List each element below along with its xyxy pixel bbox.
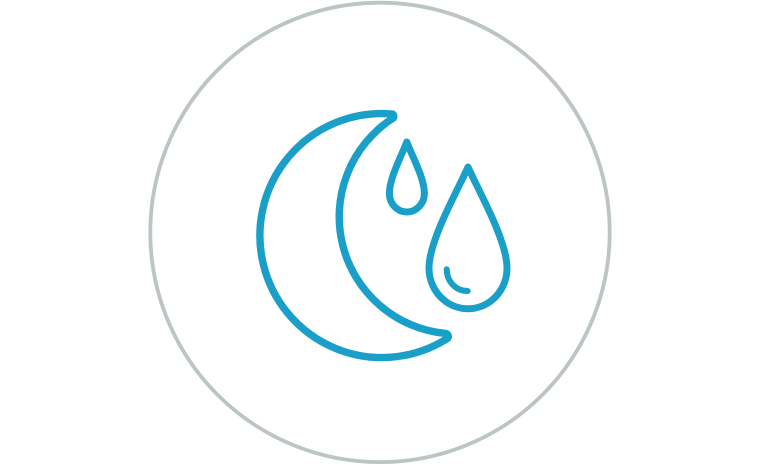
outer circle <box>150 3 610 462</box>
icon: large water drop <box>429 167 507 309</box>
icon: small water drop <box>389 142 424 212</box>
icon: crescent moon <box>260 114 448 358</box>
icon: drop highlight <box>447 269 468 291</box>
